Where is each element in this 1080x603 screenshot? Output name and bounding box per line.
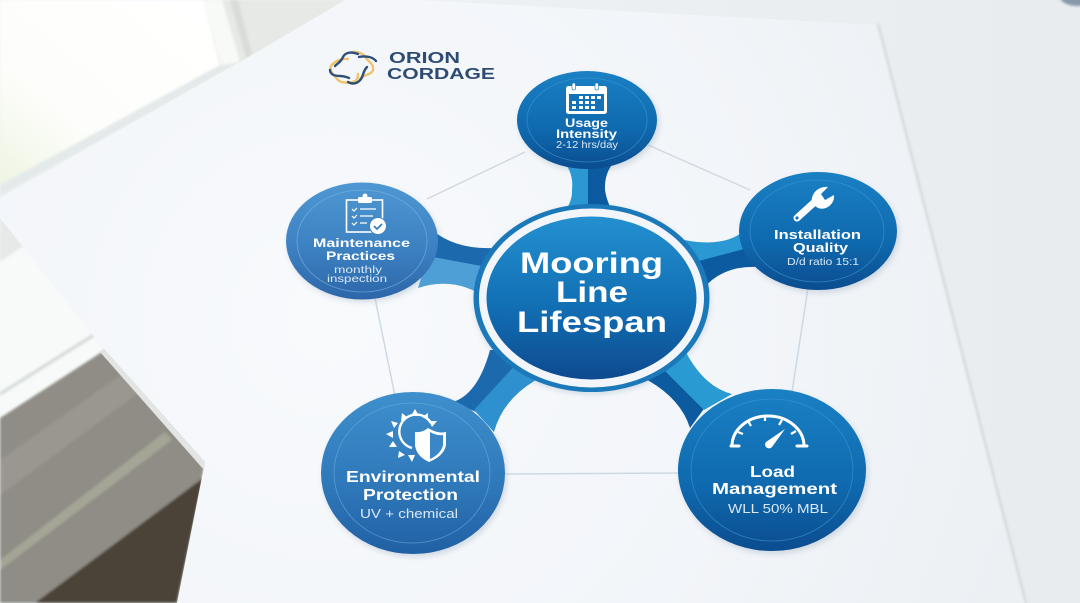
arm: environmental [453, 350, 552, 432]
label: Environmental Protection: UV + chemical [360, 506, 458, 521]
background: floor and grey skirting at lower left [0, 350, 205, 603]
label: Maintenance Practices: Practices [326, 249, 395, 263]
label: Load Management: Management [712, 481, 838, 498]
label: Usage Intensity: Intensity [556, 129, 618, 141]
background: window and frame [0, 0, 350, 196]
hub title [517, 247, 667, 339]
icon: gauge [731, 416, 807, 448]
connector arms hub to nodes [418, 160, 758, 432]
node: Installation Quality [739, 172, 897, 290]
node: Usage Intensity [517, 71, 657, 169]
logo: Orion Cordage [330, 50, 495, 84]
paper edge highlight at lower left [100, 350, 205, 470]
label: Environmental Protection [346, 469, 480, 521]
label: Installation Quality: D/d ratio 15:1 [787, 256, 859, 268]
label: Installation Quality: Installation [774, 228, 861, 242]
hub title: Lifespan [517, 306, 667, 339]
node: Environmental Protection [321, 392, 505, 554]
hub title: Mooring [520, 247, 663, 280]
label: Installation Quality: Quality [793, 241, 848, 255]
label: Installation Quality [774, 228, 861, 268]
soft shadows under the circles [288, 74, 899, 557]
label: Usage Intensity [556, 118, 618, 151]
node: Load Management [678, 389, 866, 551]
label: Environmental Protection: Environmental [346, 469, 480, 486]
decoration: dark object at top right corner [1060, 0, 1080, 6]
label: Load Management [712, 464, 838, 516]
arm: installation [684, 230, 758, 290]
icon: clipboard [346, 194, 386, 234]
label: Usage Intensity: Usage [565, 118, 608, 130]
label: Environmental Protection: Protection [363, 487, 458, 504]
label: Load Management: WLL 50% MBL [728, 501, 828, 516]
background: window sill at left [0, 215, 105, 420]
logo: Orion Cordage: CORDAGE [387, 66, 495, 83]
center hub: Mooring Line Lifespan [474, 204, 710, 392]
label: Maintenance Practices [313, 236, 410, 285]
arm: usage [556, 160, 618, 222]
pentagon connector lines [375, 145, 808, 474]
node: Maintenance Practices [286, 182, 438, 300]
label: Maintenance Practices: Maintenance [313, 236, 410, 250]
icon: sun and shield [386, 409, 446, 462]
paper right edge [877, 24, 1027, 603]
logo icon [330, 52, 376, 84]
arm: maintenance [418, 230, 495, 298]
icon: calendar [566, 83, 607, 114]
logo wordmark: ORION [389, 50, 460, 67]
label: Maintenance Practices: inspection [327, 273, 387, 285]
icon: wrench [795, 187, 834, 220]
arm: load [640, 340, 732, 428]
label: Load Management: Load [750, 464, 795, 481]
hub title: Line [556, 276, 628, 309]
label: Maintenance Practices: monthly [334, 264, 383, 276]
label: Usage Intensity: 2-12 hrs/day [556, 140, 618, 151]
